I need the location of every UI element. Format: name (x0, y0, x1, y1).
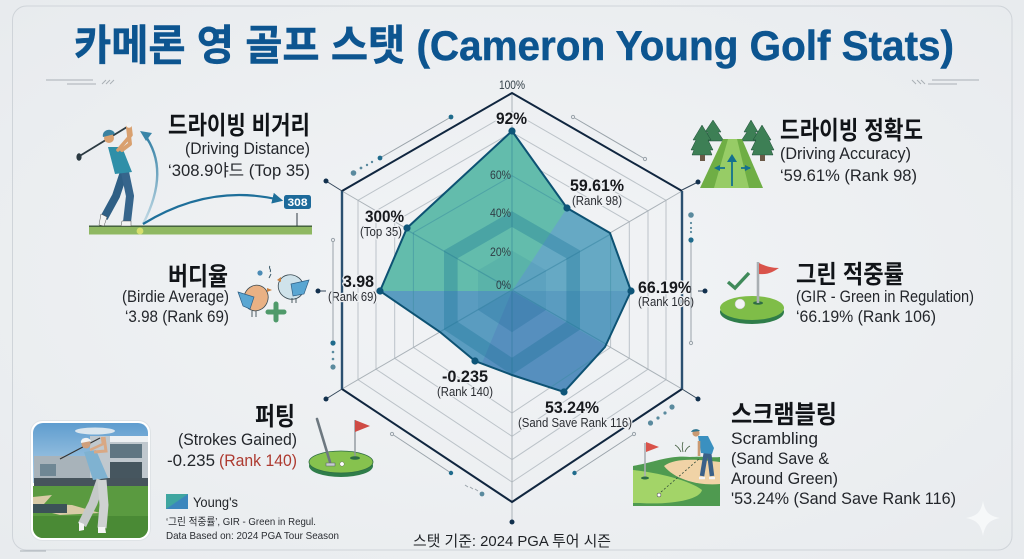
legend label: Young's (193, 494, 238, 510)
heading: 버디율 (168, 263, 228, 291)
description: Scrambling (731, 430, 818, 448)
subtitle: (GIR - Green in Regulation) (796, 288, 974, 306)
value label: putting: (Rank 140) (437, 385, 493, 399)
value label: scrambling (518, 399, 632, 430)
footer note: 스탯 기준: 2024 PGA 투어 시즌 (413, 533, 611, 550)
title: 카메론 영 골프 스탯 (Cameron Young Golf Stats) (74, 22, 954, 69)
axis percent labels (490, 80, 525, 292)
chart grid (342, 93, 682, 522)
data points (376, 127, 635, 396)
value: ‘308.9야드 (Top 35) (168, 161, 310, 180)
radar chart (316, 80, 708, 524)
panel: driving distance (76, 112, 312, 234)
value label: driving distance top: 92% (496, 110, 527, 128)
value label: birdie (328, 273, 377, 304)
icon: green with flag (720, 262, 784, 324)
value label: top 35: (Top 35) (360, 225, 402, 239)
value label: birdie: 3.98 (343, 273, 374, 291)
panel: driving accuracy (691, 117, 923, 188)
heading: 그린 적중률 (796, 261, 904, 289)
axis percent labels: 20% (490, 247, 511, 259)
panel: putting (167, 403, 373, 477)
icon: sparkle (966, 501, 1000, 536)
axis percent labels: 40% (490, 208, 511, 220)
legend swatch (166, 494, 188, 509)
axis percent labels: 60% (490, 170, 511, 182)
value (167, 452, 297, 470)
icon: fairway and trees (691, 120, 774, 188)
panel: scrambling (633, 401, 956, 508)
axis percent labels: 100% (499, 80, 525, 92)
value: ‘3.98 (Rank 69) (125, 308, 229, 326)
subtitle: (Driving Accuracy) (780, 145, 911, 163)
decorative corner marks (20, 80, 979, 551)
value: -0.235 (167, 452, 215, 470)
value label: scrambling: (Sand Save Rank 116) (518, 416, 632, 430)
value label: driving accuracy (570, 177, 624, 208)
legend (166, 494, 339, 542)
value: '53.24% (Sand Save Rank 116) (731, 490, 956, 508)
axis percent labels: 0% (496, 280, 511, 292)
value label: putting (437, 368, 493, 399)
description (731, 430, 838, 488)
value label: top 35 (360, 208, 404, 239)
value label: driving accuracy: (Rank 98) (572, 194, 622, 208)
panel: GIR (720, 261, 974, 326)
value label: GIR: 66.19% (638, 279, 692, 297)
subtitle: (Strokes Gained) (178, 431, 297, 449)
value label: birdie: (Rank 69) (328, 290, 377, 304)
value label: GIR (638, 279, 694, 309)
photo: golfer at clubhouse (30, 420, 150, 540)
data polygon outline (380, 131, 631, 392)
icon: putting green (309, 419, 373, 477)
description: Around Green) (731, 470, 838, 488)
value label: scrambling: 53.24% (545, 399, 599, 417)
heading: 드라이빙 비거리 (168, 112, 310, 140)
icon: golfer swing (76, 122, 312, 234)
heading: 스크램블링 (731, 401, 837, 429)
subtitle: (Birdie Average) (122, 288, 229, 306)
value: ‘59.61% (Rank 98) (780, 167, 917, 185)
value: ‘66.19% (Rank 106) (796, 308, 936, 326)
connector decorations (316, 115, 708, 524)
subtitle: (Driving Distance) (185, 140, 310, 158)
value label: putting: -0.235 (442, 368, 488, 386)
icon: bunker shot (633, 429, 720, 506)
panel: birdie average (122, 263, 309, 326)
value label: driving accuracy: 59.61% (570, 177, 624, 195)
value: (Rank 140) (219, 452, 297, 470)
legend note: ‘그린 적중률’, GIR - Green in Regul. (166, 516, 316, 528)
heading: 퍼팅 (255, 403, 295, 431)
data source: Data Based on: 2024 PGA Tour Season (166, 530, 339, 542)
icon: golfer swing: 308 (288, 197, 308, 209)
description: (Sand Save & (731, 450, 829, 468)
value label: top 35: 300% (365, 208, 404, 226)
value label: GIR: (Rank 106) (638, 295, 694, 309)
icon: birds (238, 266, 309, 320)
heading: 드라이빙 정확도 (780, 117, 923, 145)
data polygon fill (382, 134, 629, 390)
